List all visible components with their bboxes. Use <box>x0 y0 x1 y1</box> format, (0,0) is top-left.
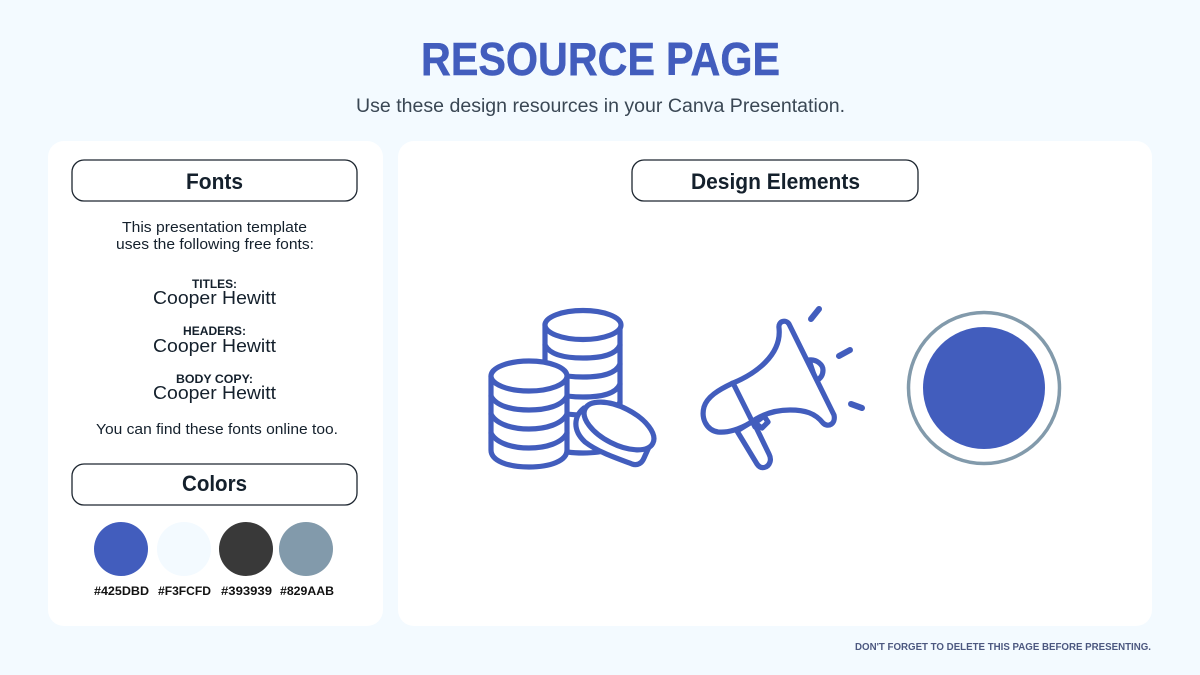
color swatch: 425DBD <box>94 522 149 598</box>
panel: fonts and colors <box>48 141 383 626</box>
text block: headers font: HEADERS: <box>183 324 246 338</box>
heading: fonts: Fonts <box>186 169 243 194</box>
color swatch: 393939 <box>219 522 273 598</box>
heading: colors: Colors <box>182 471 247 496</box>
heading: fonts <box>72 160 357 201</box>
panel: design elements <box>398 141 1152 626</box>
text block: body copy font: BODY COPY: <box>176 372 253 386</box>
heading: design elements: Design Elements <box>691 169 860 194</box>
color swatch: 829AAB <box>279 522 334 598</box>
color swatch: 393939: #393939 <box>221 584 272 598</box>
text block: headers font <box>153 324 276 356</box>
text block: body copy font: Cooper Hewitt <box>153 382 276 403</box>
icon: coin stacks <box>491 310 661 467</box>
icon: ringed circle <box>908 312 1060 464</box>
text block: find fonts note: You can find these fonts online too. <box>96 421 338 438</box>
color swatch: F3FCFD <box>157 522 211 598</box>
text block: body copy font <box>153 372 276 403</box>
title: PAGE <box>666 33 780 85</box>
color swatch: 829AAB: #829AAB <box>280 584 334 598</box>
text block: titles font: Cooper Hewitt <box>153 287 276 308</box>
text block: font intro <box>116 219 314 253</box>
subtitle: Use these design resources in your Canva Presentation. <box>356 96 845 117</box>
text block: font intro: uses the following free fonts: <box>116 236 314 253</box>
text block: headers font: Cooper Hewitt <box>153 335 276 356</box>
icon: megaphone <box>703 321 834 468</box>
footer note: DON'T FORGET TO DELETE THIS PAGE BEFORE PRESENTING. <box>855 642 1151 653</box>
text block: titles font <box>153 277 276 308</box>
icon: megaphone sound lines <box>811 309 862 408</box>
text block: font intro: This presentation template <box>122 219 307 236</box>
heading: colors <box>72 464 357 505</box>
color swatch: F3FCFD: #F3FCFD <box>158 584 211 598</box>
heading: design elements <box>632 160 918 201</box>
color swatch: 425DBD: #425DBD <box>94 584 149 598</box>
text block: titles font: TITLES: <box>192 277 237 291</box>
title: RESOURCE <box>421 33 655 85</box>
